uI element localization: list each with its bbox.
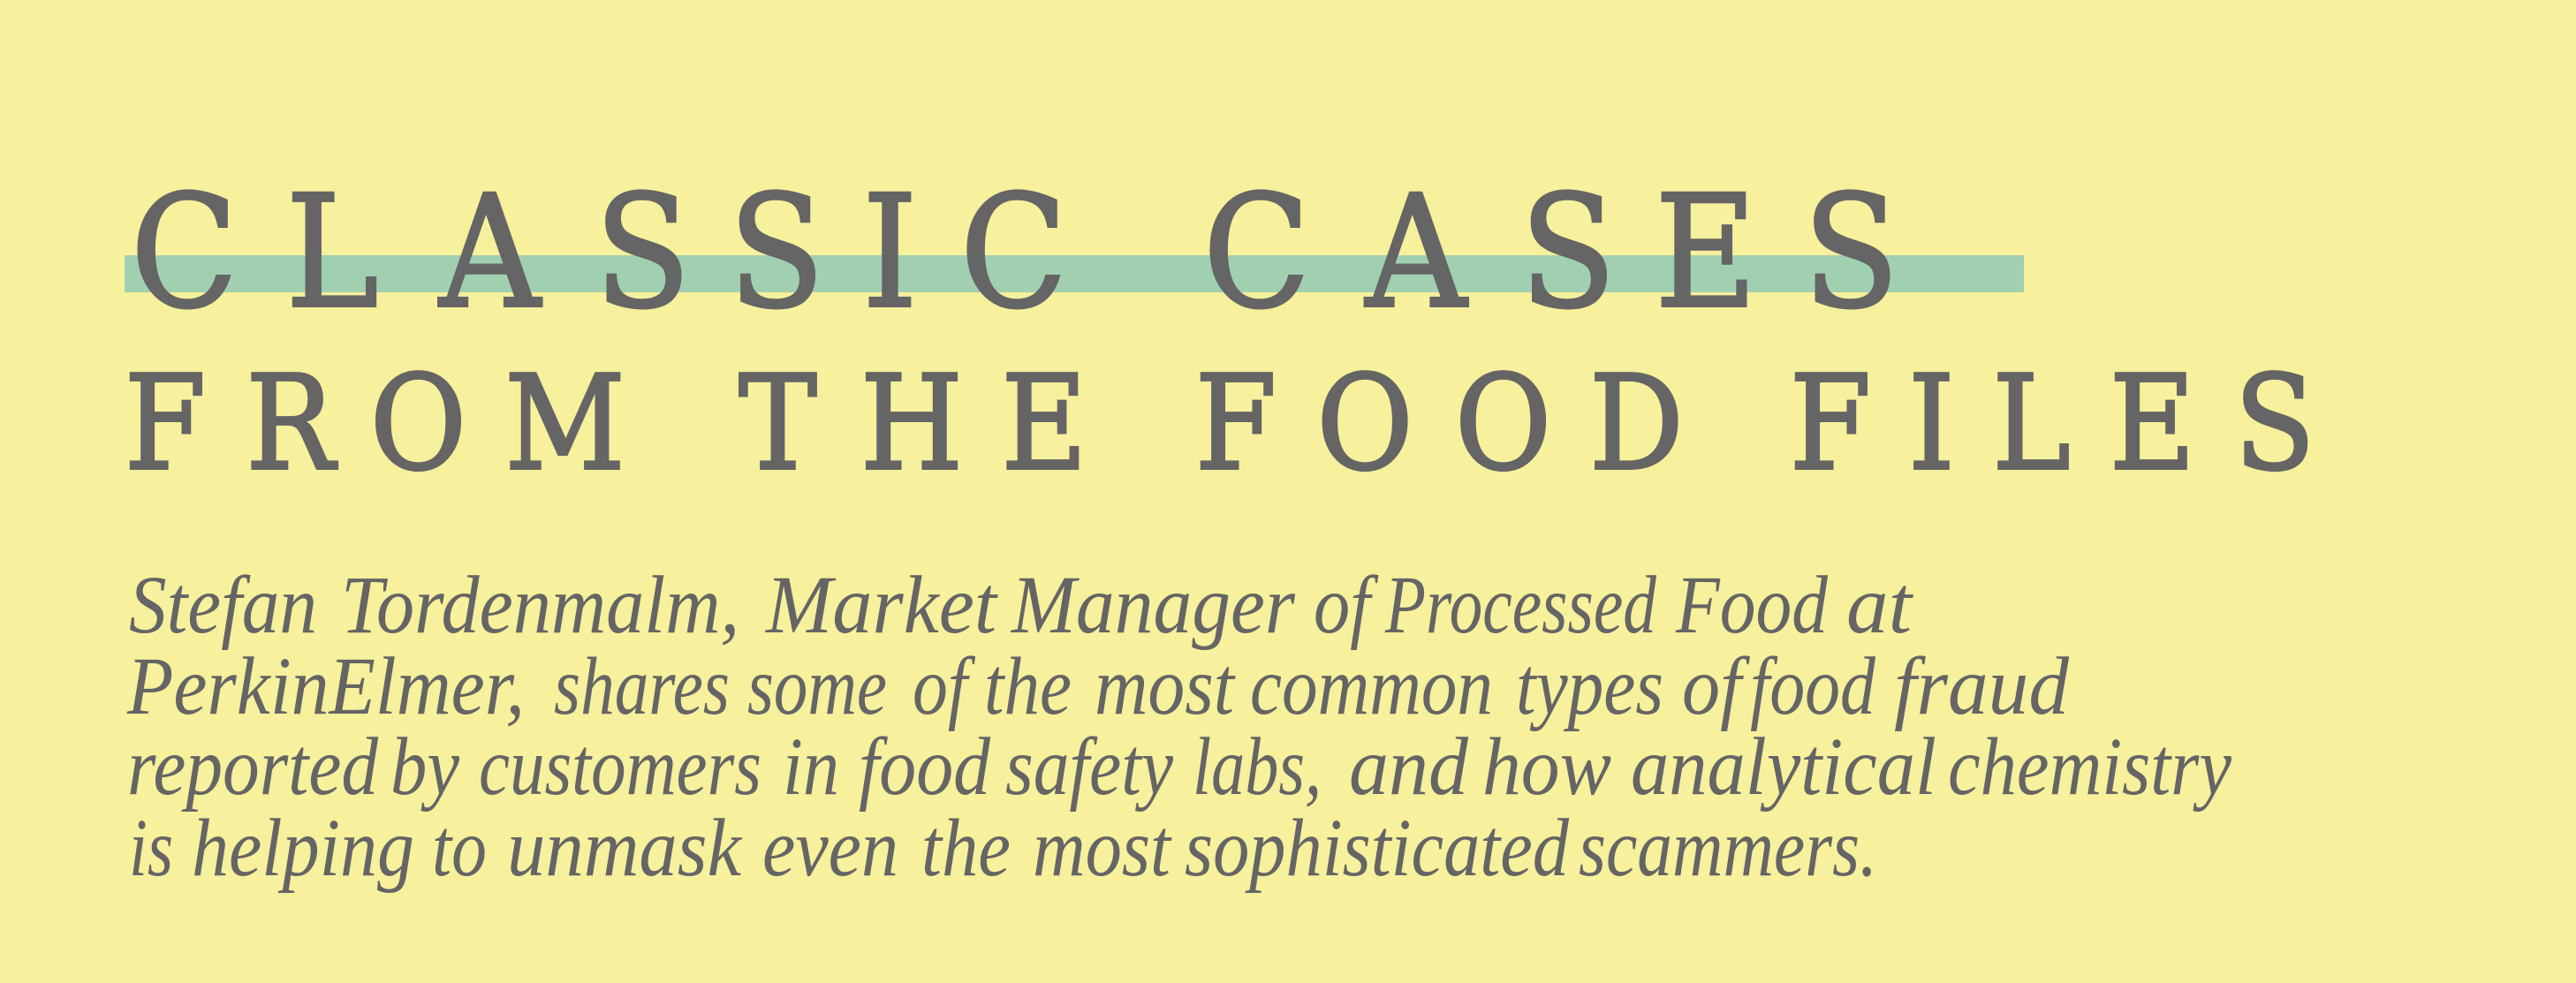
paragraph line 2: fraud <box>1894 641 2069 732</box>
paragraph line 4: even <box>762 803 898 894</box>
paragraph line 2: the <box>984 641 1072 732</box>
paragraph line 1: Processed <box>1384 560 1656 651</box>
paragraph line 3: and <box>1349 722 1468 813</box>
paragraph line 3: in <box>783 722 839 813</box>
paragraph line 1: of <box>1314 560 1379 651</box>
paragraph line 3: how <box>1482 722 1611 813</box>
heading <box>125 163 2315 500</box>
paragraph line 4: scammers. <box>1579 803 1877 894</box>
paragraph line 4: the <box>921 803 1011 894</box>
paragraph line 2: shares <box>554 641 730 732</box>
paragraph line 4: most <box>1033 803 1172 894</box>
paragraph line 2: types <box>1516 641 1663 732</box>
paragraph line 4: is <box>129 803 173 894</box>
green highlight bar behind title <box>125 255 2024 292</box>
paragraph line 2: of <box>913 641 976 732</box>
paragraph line 4: unmask <box>507 803 743 894</box>
paragraph line 1: Tordenmalm, <box>341 560 739 651</box>
paragraph line 1: Market <box>764 560 998 651</box>
paragraph line 1: Food <box>1675 560 1828 651</box>
paragraph line 2: most <box>1095 641 1236 732</box>
paragraph line 2: common <box>1250 641 1493 732</box>
paragraph line 3: customers <box>479 722 761 813</box>
paragraph line 2: food <box>1750 641 1875 732</box>
paragraph line 1: Manager <box>1010 560 1296 651</box>
paragraph line 4: to <box>432 803 487 894</box>
paragraph line 3: chemistry <box>1948 722 2232 813</box>
title line: Classic Cases: CLASSIC CASES <box>131 163 1899 344</box>
paragraph line 3: by <box>390 722 460 813</box>
paragraph line 3: reported <box>127 722 378 813</box>
paragraph line 3: food <box>859 722 990 813</box>
intro paragraph <box>126 560 2232 894</box>
paragraph line 1: at <box>1846 560 1913 651</box>
paragraph line 4: helping <box>192 803 414 894</box>
paragraph line 3: labs, <box>1193 722 1322 813</box>
paragraph line 4: sophisticated <box>1185 803 1569 894</box>
paragraph line 2: PerkinElmer, <box>126 641 525 732</box>
paragraph line 3: analytical <box>1631 722 1936 813</box>
paragraph line 1: Stefan <box>129 560 317 651</box>
paragraph line 2: of <box>1682 641 1750 732</box>
paragraph line 2: some <box>747 641 887 732</box>
paragraph line 3: safety <box>1005 722 1174 813</box>
subtitle line: From the Food Files: FROM THE FOOD FILES <box>125 348 2315 500</box>
